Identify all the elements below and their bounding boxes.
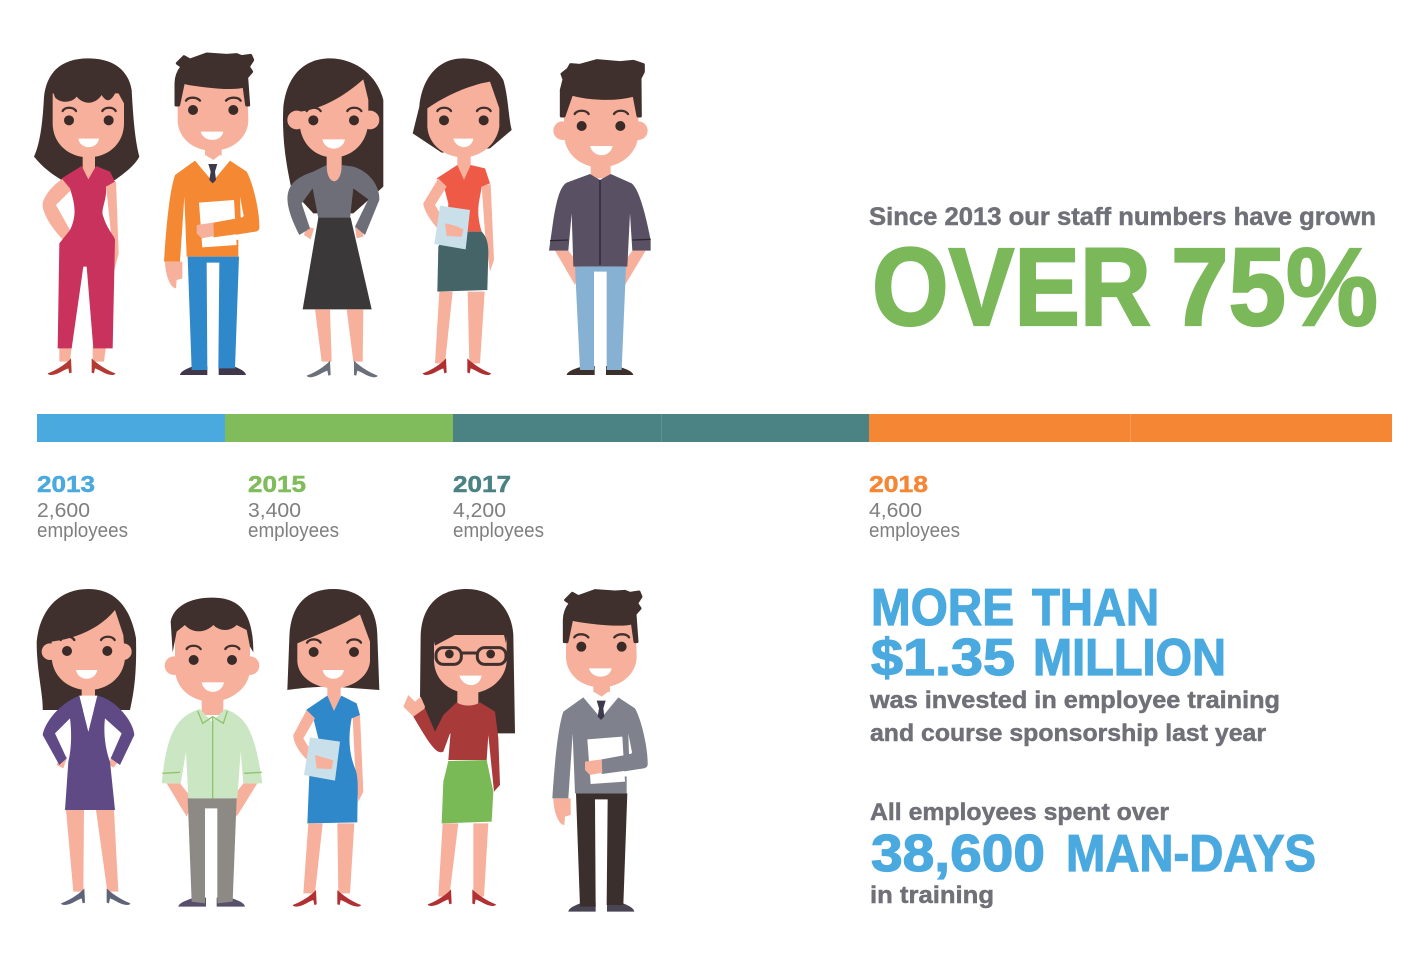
text: all employees spent over: All employees spent over (870, 799, 1169, 826)
figure: woman in gray top and black skirt (283, 58, 383, 377)
headline: more than $1.35 million: MILLION (1033, 629, 1226, 687)
timeline label: 2013 (37, 471, 128, 542)
text: training investment: was invested in employee training (869, 687, 1280, 714)
text: training investment: and course sponsorship last year (870, 720, 1266, 747)
headline: over 75%: OVER (872, 226, 1151, 349)
timeline label: 2018: 2018 (869, 471, 928, 497)
text: in training: in training (870, 882, 994, 909)
headline: more than $1.35 million: MORE (871, 579, 1014, 637)
figure: man in green shirt and gray trousers (162, 598, 262, 907)
timeline label: 2017 (453, 471, 544, 542)
timeline label: 2015: 2015 (248, 471, 306, 497)
timeline label: 2018: employees (869, 520, 960, 542)
figure: woman in blue dress (287, 589, 379, 907)
headline: 38,600 man-days: 38,600 (871, 825, 1045, 883)
headline: over 75% (872, 226, 1378, 349)
headline: more than $1.35 million (871, 579, 1226, 687)
figure: man in orange sweater with book (164, 54, 259, 375)
figure: woman in coral top and teal skirt (413, 58, 512, 375)
timeline label: 2017: employees (453, 520, 544, 542)
timeline bar (37, 414, 1392, 442)
timeline label: 2017: 4,200 (453, 500, 506, 522)
headline: 38,600 man-days (871, 825, 1316, 883)
headline: 38,600 man-days: MAN-DAYS (1066, 825, 1316, 883)
timeline label: 2013: 2013 (37, 471, 95, 497)
timeline label: 2013: 2,600 (37, 500, 90, 522)
timeline label: 2015 (248, 471, 339, 542)
timeline label: 2015: employees (248, 520, 339, 542)
figure: woman in red jumpsuit (34, 58, 139, 375)
figure: man in gray sweater with book (552, 591, 648, 912)
headline: more than $1.35 million: $1.35 (871, 629, 1015, 687)
timeline label: 2018: 4,600 (869, 500, 922, 522)
figure: man in dark shirt and light jeans (549, 61, 651, 375)
text: training investment (869, 687, 1280, 747)
headline: over 75%: 75% (1171, 226, 1378, 349)
figure: woman in purple suit (37, 589, 136, 905)
timeline label: 2018 (869, 471, 960, 542)
headline: more than $1.35 million: THAN (1032, 579, 1159, 637)
figure: waving woman with glasses (403, 589, 515, 906)
timeline label: 2017: 2017 (453, 471, 511, 497)
timeline label: 2015: 3,400 (248, 500, 301, 522)
timeline label: 2013: employees (37, 520, 128, 542)
text: staff growth intro: Since 2013 our staff numbers have grown (869, 203, 1376, 231)
